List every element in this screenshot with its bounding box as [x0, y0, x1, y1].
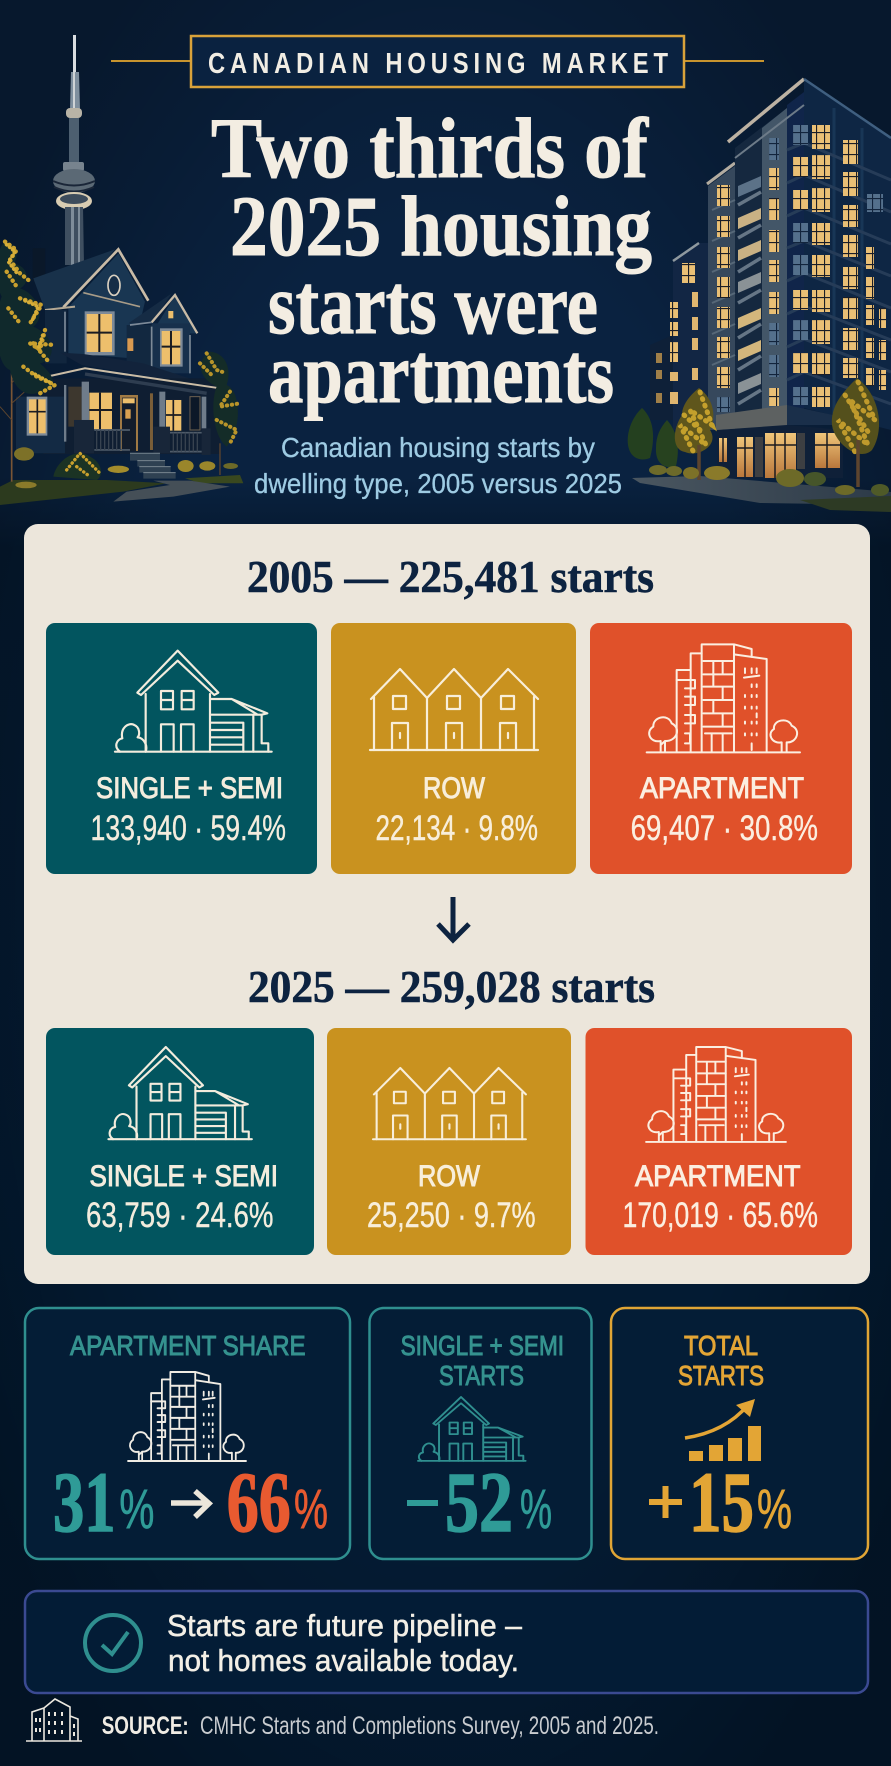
stat card: apartment share: 66 — [227, 1454, 291, 1550]
icon: rising bars with arrow — [685, 1399, 761, 1461]
stat card: single + semi starts: STARTS — [439, 1360, 524, 1391]
icon: building — [26, 1699, 82, 1741]
card: 2025 single + semi: SINGLE + SEMI — [90, 1160, 278, 1193]
title: Two thirds of — [211, 100, 649, 196]
panel: 2005 vs 2025 comparison — [24, 524, 870, 1284]
callout: pipeline note — [25, 1591, 868, 1693]
stat card: apartment share: % — [294, 1477, 328, 1540]
stat card: single + semi starts: % — [520, 1477, 552, 1540]
stat card: total starts: 15 — [689, 1454, 754, 1550]
card: 2005 apartment — [590, 623, 852, 874]
card: 2005 row — [331, 623, 576, 874]
icon: check circle — [85, 1615, 141, 1671]
stat card: total starts — [611, 1308, 868, 1559]
title: apartments — [268, 325, 614, 421]
title: 2025 housing — [230, 178, 652, 274]
heading: 2025: 2025 — 259,028 starts — [248, 961, 655, 1012]
card: 2005 apartment: 69,407 · 30.8% — [631, 809, 818, 848]
card: 2005 single + semi — [46, 623, 317, 874]
illustration: lit apartment tower with trees — [650, 79, 891, 478]
source line — [26, 1699, 659, 1741]
stat card: single + semi starts — [370, 1308, 592, 1559]
stat card: total starts: TOTAL — [684, 1330, 758, 1361]
stat card: apartment share: % — [119, 1477, 154, 1540]
card: 2025 single + semi — [46, 1028, 314, 1255]
heading: 2005: 2005 — 225,481 starts — [247, 551, 654, 602]
header badge: CANADIAN HOUSING MARKET — [208, 47, 668, 80]
card: 2025 apartment: APARTMENT — [635, 1160, 800, 1193]
illustration: CN tower — [53, 35, 95, 265]
card: 2005 apartment: APARTMENT — [640, 772, 804, 805]
subtitle: Canadian housing starts by — [281, 432, 595, 463]
stat card: single + semi starts: 52 — [445, 1454, 513, 1550]
card: 2025 apartment — [586, 1028, 852, 1255]
card: 2005 single + semi: SINGLE + SEMI — [96, 772, 283, 805]
card: 2025 row: 25,250 · 9.7% — [367, 1196, 536, 1235]
callout: pipeline note: Starts are future pipeline – — [167, 1608, 523, 1643]
stat card: apartment share — [25, 1308, 350, 1559]
illustration: lit house with trees — [0, 242, 243, 505]
stat card: total starts: STARTS — [678, 1360, 764, 1391]
stat card: total starts: % — [757, 1477, 792, 1540]
illustration: trees and walkway by the tower — [628, 378, 891, 512]
subtitle — [254, 432, 622, 499]
arrow: 2005 to 2025 — [438, 897, 469, 941]
card: 2025 apartment: 170,019 · 65.6% — [622, 1196, 818, 1235]
title — [211, 100, 652, 421]
card: 2025 row: ROW — [418, 1160, 481, 1193]
stat card: apartment share: APARTMENT SHARE — [70, 1330, 306, 1361]
title: starts were — [268, 256, 598, 352]
card: 2025 row — [327, 1028, 571, 1255]
stat card: single + semi starts: SINGLE + SEMI — [401, 1330, 564, 1361]
card: 2005 row: ROW — [423, 772, 486, 805]
card: 2005 single + semi: 133,940 · 59.4% — [90, 809, 286, 848]
callout: pipeline note: not homes available today. — [168, 1643, 519, 1678]
source line: CMHC Starts and Completions Survey, 2005 and 2025. — [200, 1712, 659, 1740]
card: 2025 single + semi: 63,759 · 24.6% — [86, 1196, 274, 1235]
header badge — [111, 36, 764, 87]
source line: SOURCE: — [102, 1712, 189, 1740]
stat card: apartment share: 31 — [53, 1454, 116, 1550]
card: 2005 row: 22,134 · 9.8% — [376, 809, 538, 848]
subtitle: dwelling type, 2005 versus 2025 — [254, 468, 622, 499]
